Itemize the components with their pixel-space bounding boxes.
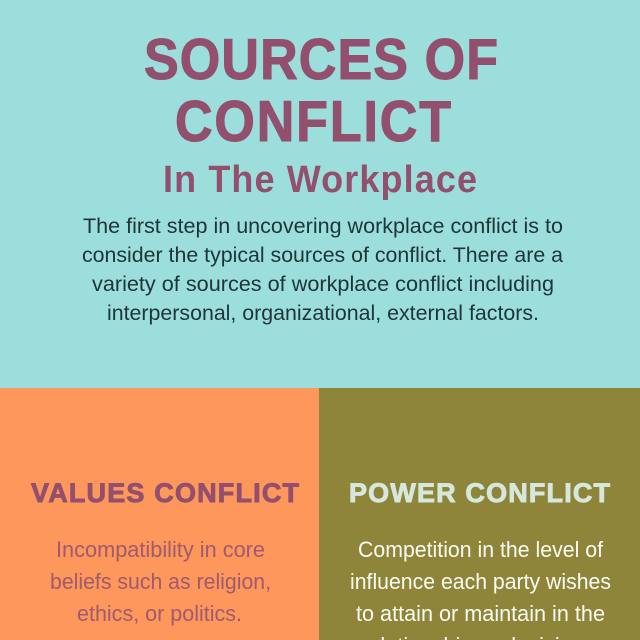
text: values description [50, 537, 271, 626]
panel: values conflict [0, 388, 319, 640]
intro text [82, 214, 563, 325]
heading: values conflict: VALUES CONFLICT [31, 478, 300, 508]
text: power description: Competition in the level of [358, 537, 604, 562]
text: power description [350, 537, 611, 640]
intro text: The first step in uncovering workplace conflict is to [83, 214, 563, 238]
heading: power conflict: POWER CONFLICT [349, 478, 610, 508]
title [144, 28, 498, 154]
title: SOURCES OF [144, 28, 498, 92]
subtitle: In The Workplace [163, 157, 477, 200]
text: values description: ethics, or politics. [77, 601, 242, 626]
intro text: consider the typical sources of conflict. There are a [82, 243, 563, 267]
intro text: variety of sources of workplace conflict including [92, 272, 554, 296]
text: power description: influence each party wishes [350, 569, 611, 594]
panel: header [0, 0, 640, 388]
title: CONFLICT [175, 90, 451, 154]
panel: power conflict [319, 388, 640, 640]
text: values description: Incompatibility in core [56, 537, 265, 562]
intro text: interpersonal, organizational, external factors. [107, 301, 539, 325]
text: power description: to attain or maintain in the [356, 601, 605, 626]
text: values description: beliefs such as religion, [50, 569, 271, 594]
